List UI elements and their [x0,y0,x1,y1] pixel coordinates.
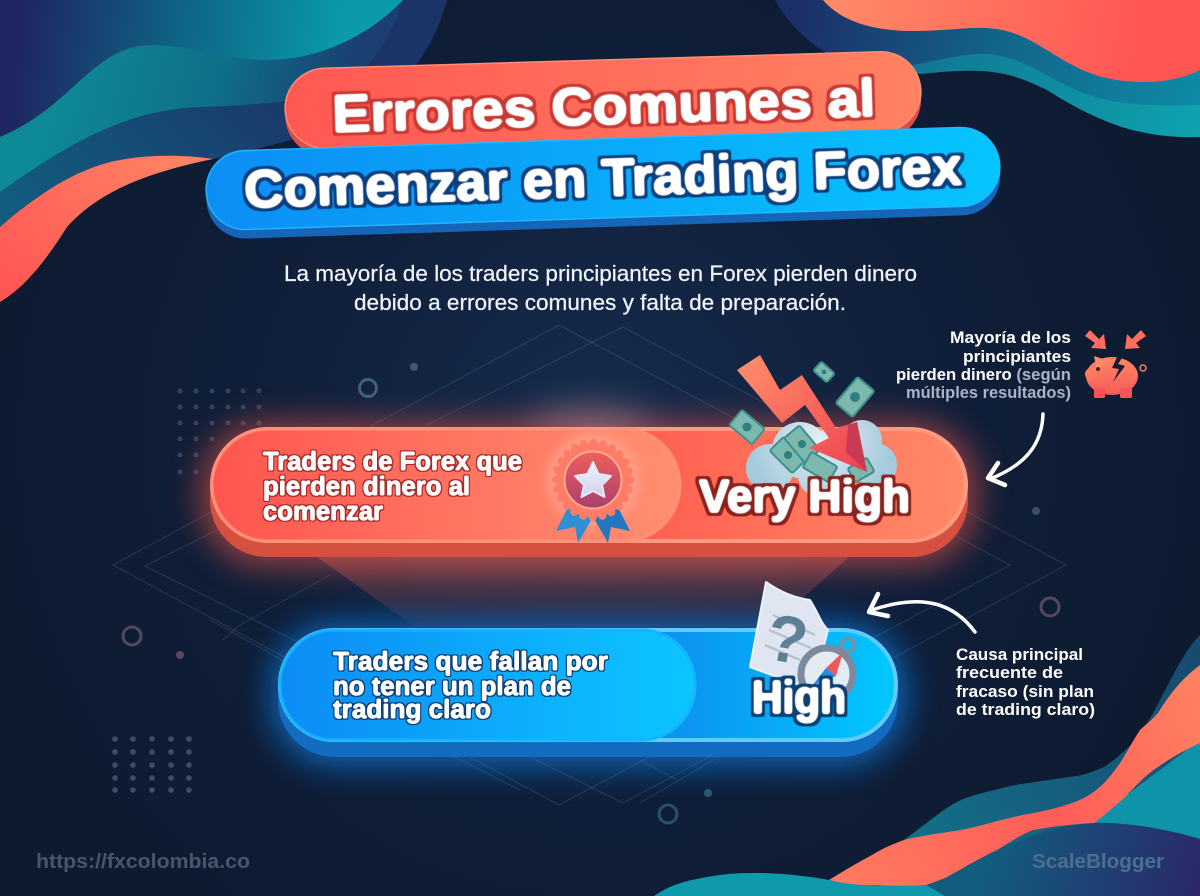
callout text: múltiples resultados) [906,384,1071,402]
background grid of diamonds [113,325,1066,805]
icon: document with question mark: ? [761,599,813,679]
label: traders de forex [263,448,522,526]
left segment [280,630,695,740]
title banner: line 2 [205,126,1001,240]
callout text: pierden dinero (según [896,366,1071,384]
callout text: principiantes [963,348,1071,366]
title banner: line 1 [284,51,922,157]
label: traders de forex: comenzar [263,498,383,526]
label: traders que fallan: no tener un plan de [333,673,571,701]
wave: top left [0,0,447,302]
callout text: frecuente de [956,664,1063,682]
icon: document with question mark [750,582,828,690]
label: traders que fallan: Traders que fallan por [333,648,608,676]
value: high: High [752,671,846,723]
callout text [896,329,1071,402]
icon: clouds with falling money and red arrow [729,355,897,497]
label: traders que fallan: trading claro [333,696,491,724]
panel: very high bar [200,355,978,567]
arrow: to very high bar [988,414,1043,485]
subtitle: La mayoría de los traders principiantes en Forex pierden dinero [284,261,917,286]
footer: site url: https://fxcolombia.co [36,851,250,873]
icon: broken piggy bank [1085,330,1146,398]
footer: brand: ScaleBlogger [1032,851,1164,873]
callout text [956,646,1095,719]
title text: line 2: Comenzar en Trading Forex [243,137,963,220]
icon: compass [801,638,854,700]
funnel glow between the bars [317,557,849,627]
title text: line 1: Errores Comunes al [331,69,876,144]
dot grid: upper left [178,388,262,474]
decorative rings and dots [123,363,1059,823]
callout: majority lose money [896,329,1146,485]
callout text: fracaso (sin plan [956,683,1094,701]
subtitle: debido a errores comunes y falta de preparación. [354,290,846,315]
label: traders que fallan [333,648,608,724]
value: very high: Very High [699,470,910,522]
callout text: Mayoría de los [950,329,1071,347]
arrow: to high bar [869,594,975,632]
left segment [212,429,680,541]
icon: medal with star [547,434,639,543]
callout text: de trading claro) [956,701,1095,719]
label: traders de forex: Traders de Forex que [263,448,522,476]
callout text: Causa principal [956,646,1083,664]
subtitle [284,261,917,315]
label: traders de forex: pierden dinero al [263,473,470,501]
panel: high bar [270,582,908,767]
wave: bottom right [654,635,1200,896]
dot grid: lower left [112,736,192,793]
wave: top right [775,0,1200,137]
callout: main cause of failure [869,594,1095,719]
